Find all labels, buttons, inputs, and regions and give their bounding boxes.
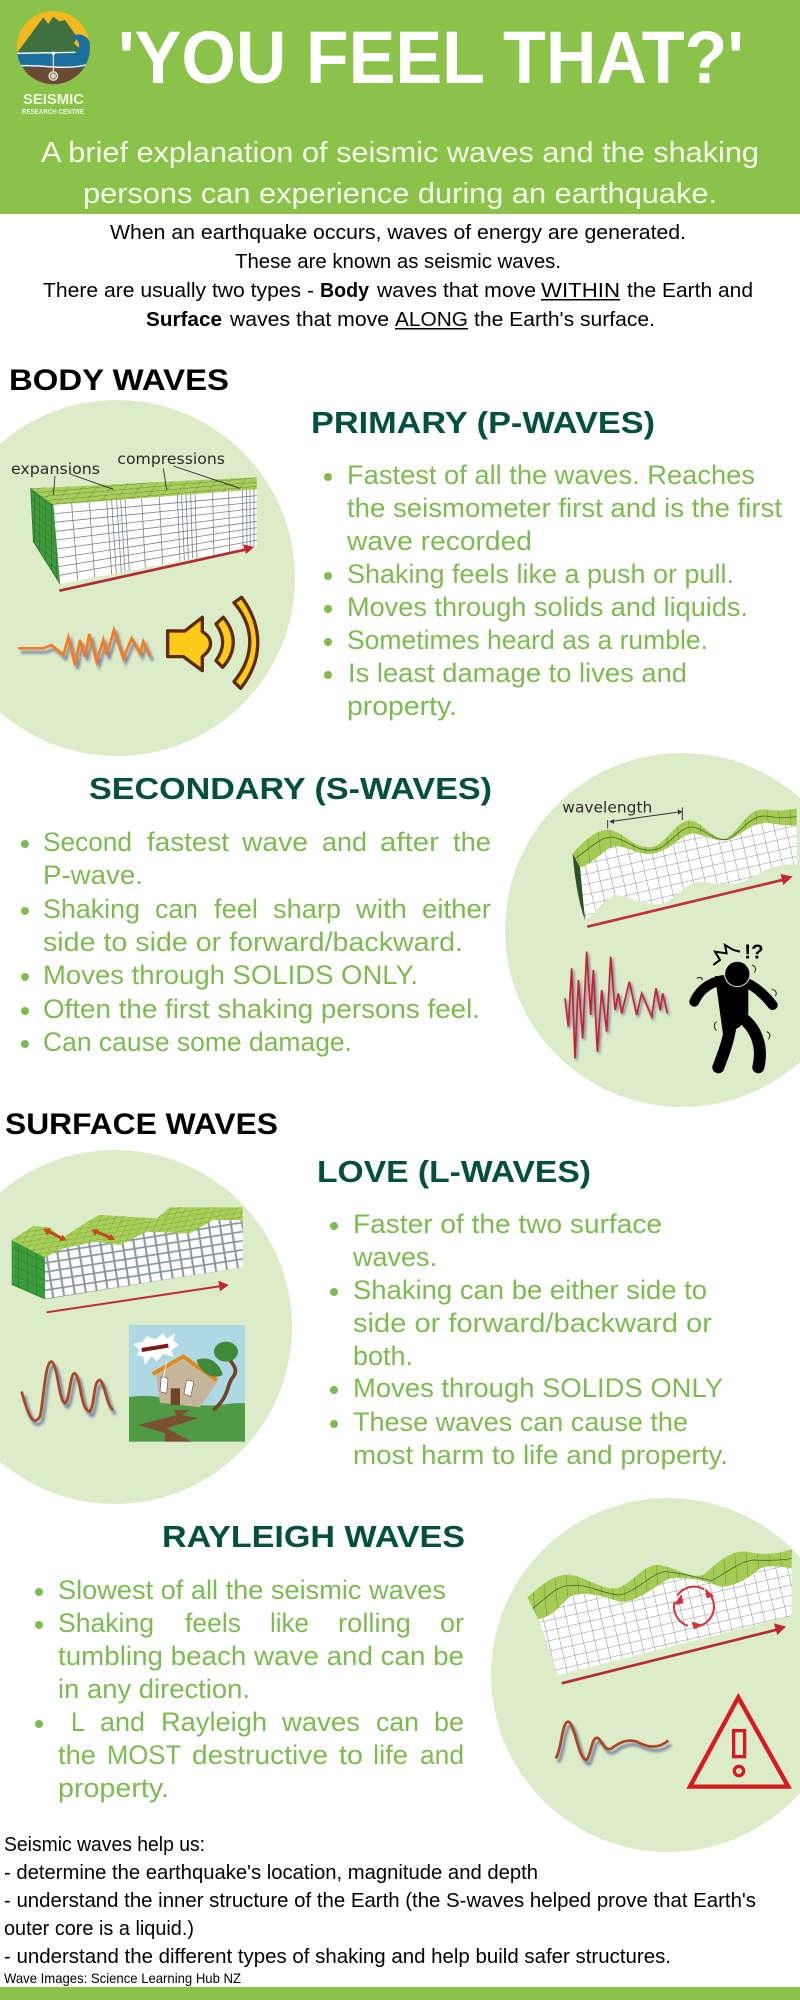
introduction text: Body bbox=[320, 279, 370, 302]
bullet list: Shaking feels like a push or pull. bbox=[347, 559, 734, 589]
introduction text: the Earth and bbox=[627, 279, 753, 302]
subtitle: persons can experience during an earthquake. bbox=[83, 178, 717, 210]
bullet list: wave bbox=[241, 827, 308, 857]
heading: SECONDARY (S-WAVES) bbox=[89, 771, 492, 806]
icon: warning triangle bbox=[690, 1697, 788, 1787]
illustration: P-wave block bbox=[11, 451, 257, 591]
bullet list: Sometimes heard as a rumble. bbox=[347, 625, 708, 655]
introduction text: ALONG bbox=[395, 308, 468, 331]
bullet list: L bbox=[71, 1707, 85, 1737]
bullet list: property. bbox=[347, 691, 457, 721]
bullet list: Slowest of all the seismic waves bbox=[58, 1575, 446, 1605]
bullet list: waves. bbox=[352, 1242, 437, 1272]
icon: L-wave seismogram bbox=[22, 1362, 116, 1424]
circle background bbox=[505, 753, 800, 1107]
icon: P-wave seismogram bbox=[18, 630, 153, 669]
bullet list: Moves through SOLIDS ONLY. bbox=[43, 960, 418, 990]
bullet list: property. bbox=[58, 1773, 169, 1803]
bullet list: Rayleigh bbox=[161, 1707, 267, 1737]
logo: Seismic Research Centre: SEISMIC bbox=[23, 91, 84, 108]
section heading: body waves: BODY WAVES bbox=[9, 364, 229, 397]
bullet list: and bbox=[322, 827, 367, 857]
panel: primary waves bbox=[0, 400, 782, 756]
closing text: why seismic waves help: - understand the different types of shaking and help build safer structures. bbox=[4, 1945, 671, 1968]
icon: shaking person bbox=[694, 940, 776, 1067]
bullet list: Shaking bbox=[58, 1608, 154, 1638]
section heading: surface waves: SURFACE WAVES bbox=[5, 1108, 278, 1141]
heading: LOVE (L-WAVES) bbox=[317, 1154, 591, 1189]
panel: rayleigh waves bbox=[35, 1498, 800, 1852]
icon: loudspeaker bbox=[168, 597, 258, 688]
heading: RAYLEIGH WAVES bbox=[162, 1519, 465, 1554]
bullet list: and bbox=[100, 1707, 145, 1737]
bullet list: fastest bbox=[147, 827, 230, 857]
panel: secondary waves bbox=[21, 753, 800, 1107]
bullet list: Can cause some damage. bbox=[43, 1027, 352, 1057]
bullet list: life bbox=[373, 1740, 408, 1770]
icon: Rayleigh seismogram bbox=[556, 1722, 671, 1764]
closing text: why seismic waves help bbox=[4, 1833, 756, 1968]
bullet list: both. bbox=[353, 1341, 413, 1371]
introduction text: Surface bbox=[146, 308, 222, 331]
illustration: P-wave block: compressions bbox=[117, 451, 225, 468]
bullet list: Shaking bbox=[43, 894, 140, 924]
bullet list: like bbox=[270, 1608, 309, 1638]
logo: Seismic Research Centre: RESEARCH CENTRE bbox=[22, 109, 84, 116]
introduction text: WITHIN bbox=[541, 279, 620, 302]
icon: shaking person: !? bbox=[744, 940, 764, 963]
bullet list: be bbox=[434, 1707, 464, 1737]
bullet list: Is least damage to lives and bbox=[348, 658, 687, 688]
bullet list bbox=[35, 1575, 464, 1803]
introduction text: waves that move bbox=[376, 279, 536, 302]
bullet list: with bbox=[355, 894, 407, 924]
bullet list: and bbox=[420, 1740, 464, 1770]
circle background bbox=[0, 400, 295, 756]
bullet list: in any direction. bbox=[58, 1674, 250, 1704]
bullet list: Fastest of all the waves. Reaches bbox=[347, 460, 755, 490]
logo: Seismic Research Centre bbox=[13, 11, 93, 116]
heading: PRIMARY (P-WAVES) bbox=[311, 405, 655, 440]
bullet list: rolling bbox=[338, 1608, 411, 1638]
circle background bbox=[0, 1150, 292, 1504]
bullet list: wave recorded bbox=[346, 526, 532, 556]
bullet list: These waves can cause the bbox=[353, 1407, 688, 1437]
bullet list: MOST bbox=[107, 1740, 181, 1770]
bullet list: waves bbox=[281, 1707, 360, 1737]
illustration: shaken house bbox=[129, 1325, 245, 1442]
bullet list: Moves through solids and liquids. bbox=[347, 592, 748, 622]
bullet list bbox=[324, 460, 782, 721]
illustration: L-wave block bbox=[12, 1207, 243, 1312]
bullet list: the seismometer first and is the first bbox=[347, 493, 782, 523]
subtitle: A brief explanation of seismic waves and the shaking bbox=[41, 137, 759, 169]
bullet list: Often the first shaking persons feel. bbox=[43, 994, 480, 1024]
bullet list: the bbox=[453, 827, 491, 857]
bullet list: most harm to life and property. bbox=[353, 1440, 728, 1470]
header banner bbox=[0, 0, 800, 214]
bullet list: the bbox=[58, 1740, 96, 1770]
illustration: S-wave block bbox=[562, 799, 797, 927]
icon: S-wave seismogram bbox=[565, 952, 669, 1060]
footer bar bbox=[0, 1987, 800, 2000]
bullet list: side to side or forward/backward. bbox=[43, 927, 463, 957]
closing text: why seismic waves help: Seismic waves help us: bbox=[4, 1833, 205, 1856]
bullet list: after bbox=[380, 827, 439, 857]
closing text: why seismic waves help: - determine the earthquake's location, magnitude and depth bbox=[4, 1861, 538, 1884]
illustration: S-wave block: wavelength bbox=[562, 799, 652, 816]
circle background bbox=[491, 1498, 800, 1852]
subtitle bbox=[41, 137, 759, 210]
bullet list: can bbox=[155, 894, 198, 924]
introduction text: waves that move bbox=[229, 308, 389, 331]
bullet list: Faster of the two surface bbox=[353, 1209, 662, 1239]
bullet list: tumbling beach wave and can be bbox=[58, 1641, 464, 1671]
bullet list: or bbox=[440, 1608, 464, 1638]
title: 'YOU FEEL THAT?' bbox=[118, 16, 744, 99]
bullet list: to bbox=[339, 1740, 363, 1770]
panel: love waves bbox=[0, 1150, 728, 1504]
introduction text bbox=[43, 221, 753, 331]
bullet list: can bbox=[376, 1707, 419, 1737]
bullet list: Shaking can be either side to bbox=[353, 1275, 707, 1305]
bullet list: feel bbox=[214, 894, 258, 924]
introduction text: When an earthquake occurs, waves of energy are generated. bbox=[110, 221, 686, 244]
bullet list: sharp bbox=[273, 894, 341, 924]
illustration: P-wave block: expansions bbox=[11, 461, 100, 478]
introduction text: There are usually two types - bbox=[43, 279, 314, 302]
closing text: why seismic waves help: - understand the inner structure of the Earth (the S-waves helped prove that Earth's bbox=[4, 1889, 756, 1912]
closing text: why seismic waves help: outer core is a liquid.) bbox=[4, 1917, 194, 1940]
bullet list: P-wave. bbox=[43, 860, 143, 890]
introduction text: the Earth's surface. bbox=[474, 308, 655, 331]
bullet list bbox=[330, 1209, 728, 1470]
image credit: Wave Images: Science Learning Hub NZ bbox=[4, 1970, 241, 1986]
bullet list: Moves through SOLIDS ONLY bbox=[353, 1373, 723, 1403]
bullet list: either bbox=[422, 894, 491, 924]
introduction text: These are known as seismic waves. bbox=[235, 250, 561, 273]
bullet list bbox=[21, 827, 491, 1057]
bullet list: destructive bbox=[192, 1740, 328, 1770]
bullet list: feels bbox=[185, 1608, 241, 1638]
bullet list: side or forward/backward or bbox=[353, 1308, 712, 1338]
bullet list: Second bbox=[43, 827, 132, 857]
illustration: Rayleigh wave block bbox=[527, 1549, 792, 1683]
